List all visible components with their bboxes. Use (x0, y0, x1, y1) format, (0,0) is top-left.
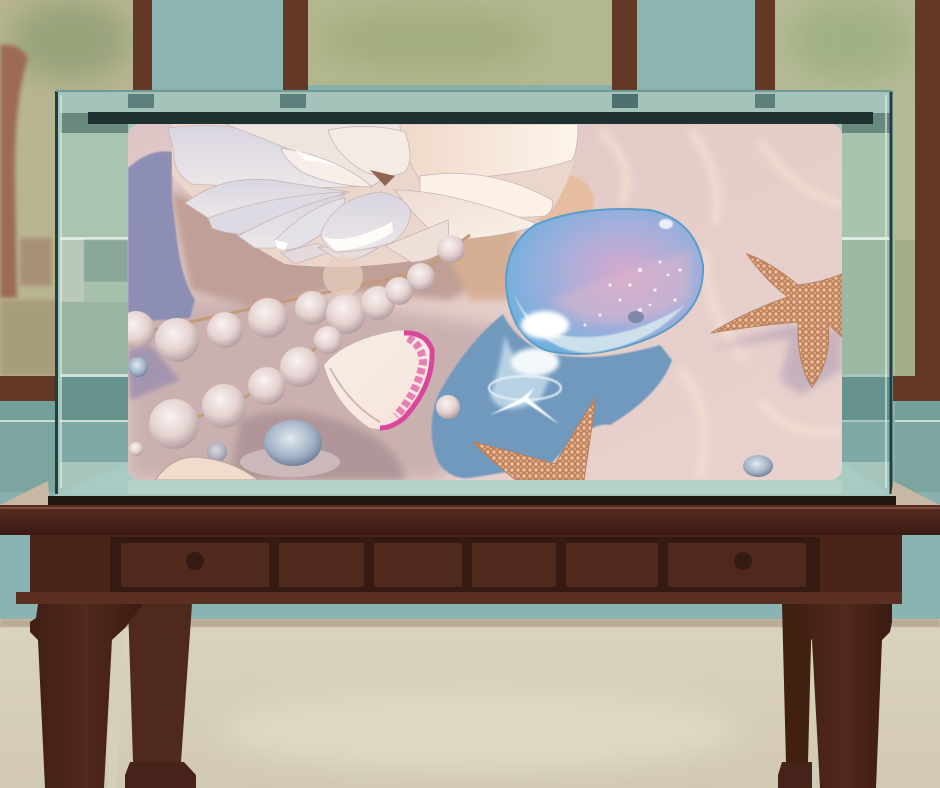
hedge (0, 300, 133, 376)
shadows and sunlit ripples (128, 130, 842, 480)
teal wall panels (152, 0, 283, 88)
scallop shell bottom left (155, 457, 258, 480)
back petals right (400, 124, 578, 180)
tank interior seen through glass (55, 90, 893, 496)
tank bottom (60, 462, 888, 494)
flower (168, 124, 578, 267)
tank top rim (58, 92, 890, 113)
pink shell (324, 331, 434, 429)
pearl necklace (117, 235, 470, 456)
picture panel: pearls, shells and glass stone (117, 124, 842, 480)
window frames (0, 0, 940, 401)
back petals left (168, 126, 372, 188)
centre petals (328, 126, 410, 176)
lower petals left (185, 179, 350, 218)
starfish bottom (473, 397, 596, 480)
shadow of right starfish (705, 325, 842, 395)
outer left leg (30, 604, 143, 788)
starfish right (711, 254, 842, 387)
glass bubbles (128, 357, 773, 477)
tank corner edges (56, 91, 891, 494)
drawer knobs (186, 552, 204, 570)
inner left leg (128, 604, 192, 762)
table (0, 481, 940, 788)
legs (30, 604, 892, 788)
table top (0, 481, 50, 505)
tree trunk (0, 45, 28, 298)
shell behind flower (536, 174, 594, 222)
flower base shade (172, 124, 578, 267)
aquarium glass tank (55, 90, 893, 496)
inner right leg (782, 604, 812, 762)
glass stone (506, 209, 703, 354)
stone blue cast shadow (432, 314, 672, 478)
outer right leg (795, 604, 892, 788)
small pearl (436, 395, 460, 419)
highlight on big petal (322, 222, 393, 251)
apron with drawers (30, 535, 902, 593)
floor (0, 619, 940, 788)
window panes with garden view (0, 0, 915, 378)
